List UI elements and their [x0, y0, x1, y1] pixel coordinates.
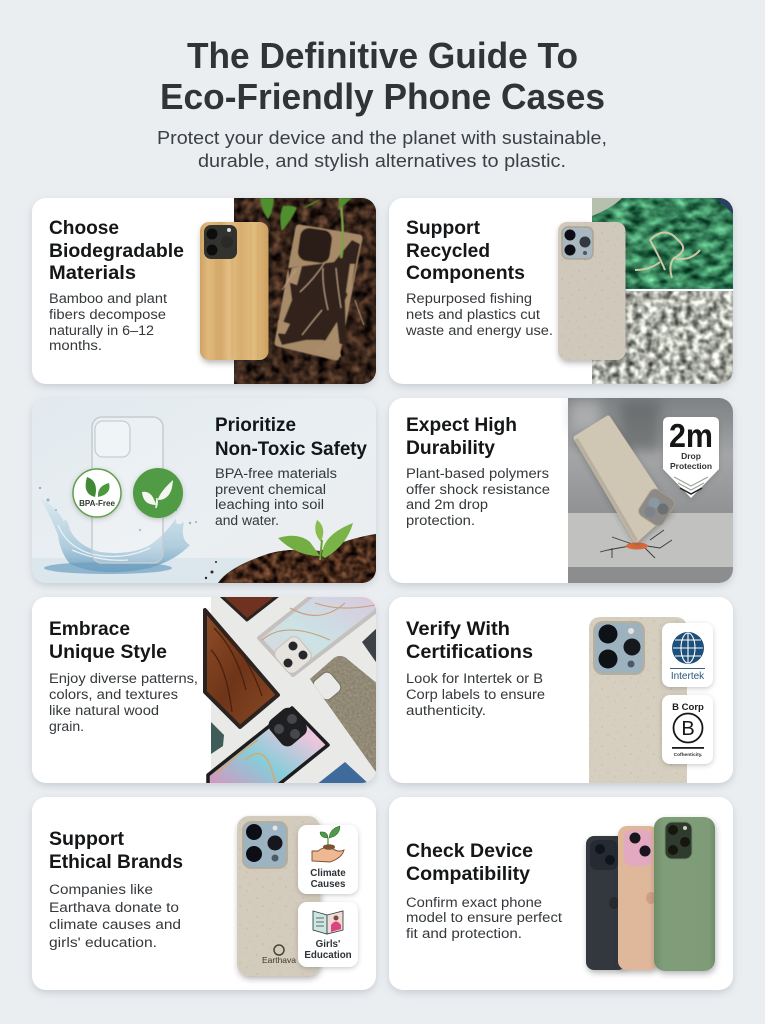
body text: durability: offer shock resistance [406, 482, 550, 498]
badge: 2m drop protection: Drop [681, 451, 701, 461]
illustration: clear phone case [92, 417, 163, 563]
body text: biodegradable: months. [49, 338, 102, 354]
body text: recycled [405, 291, 553, 339]
heading: choose biodegradable materials: Choose [49, 217, 119, 239]
body text: style [49, 671, 198, 735]
icon: BPA-free badge: BPA-Free [79, 499, 115, 508]
illustration: soil with seedling [205, 520, 376, 583]
body text: non-toxic [215, 466, 337, 529]
panel: prioritize non-toxic safety [32, 398, 376, 583]
heading: compatibility: Compatibility [406, 863, 530, 885]
badge: climate causes [298, 825, 358, 894]
icon: BPA-free badge [73, 469, 121, 517]
subtitle [157, 127, 607, 171]
body text: durability: and 2m drop [406, 497, 488, 513]
heading: ethical brands: Ethical Brands [49, 851, 183, 873]
body text: style: colors, and textures [49, 687, 178, 703]
photo: assorted patterned cases [205, 595, 385, 790]
badge: girls' education: Education [304, 950, 352, 961]
panel: support recycled components [389, 198, 733, 384]
illustration: water splash [32, 486, 256, 583]
phone: bamboo case [200, 222, 268, 360]
phone: peach case [618, 826, 658, 970]
phone: close-up speckled case [589, 617, 687, 783]
body text: durability: protection. [406, 513, 475, 529]
body text: style: grain. [49, 719, 84, 735]
body text: biodegradable [49, 291, 167, 354]
subtitle: durable, and stylish alternatives to plastic. [198, 150, 566, 171]
phones: three colour cases [586, 817, 715, 971]
panel: expect high durability [389, 398, 733, 583]
phone: Earthava case: Earthava [262, 955, 296, 965]
body text: ethical brands: Earthava donate to [49, 900, 179, 916]
body text: non-toxic: prevent chemical [215, 482, 326, 498]
body text: ethical brands [49, 882, 181, 951]
badge: girls' education: Girls' [316, 939, 340, 950]
badge: B Corp: B Corp [672, 702, 704, 713]
title: Eco-Friendly Phone Cases [160, 76, 605, 117]
heading: support recycled components [406, 217, 525, 284]
body text: certifications: authenticity. [406, 703, 486, 719]
body text: certifications: Corp labels to ensure [406, 687, 545, 703]
body text: biodegradable: Bamboo and plant [49, 291, 167, 307]
badge: B Corp [662, 695, 713, 764]
case: dark green corner [211, 722, 224, 754]
body text: ethical brands: girls' education. [49, 935, 157, 951]
body text: biodegradable: fibers decompose [49, 307, 166, 323]
body text: ethical brands: Companies like [49, 882, 153, 898]
body text: compatibility: Confirm exact phone [406, 895, 542, 911]
body text: durability: Plant-based polymers [406, 466, 549, 482]
heading: ethical brands [49, 828, 183, 873]
panel: choose biodegradable materials [32, 198, 376, 384]
heading: unique style [49, 618, 167, 663]
body text: biodegradable: naturally in 6–12 [49, 323, 154, 339]
body text: compatibility [406, 895, 562, 942]
icon: green leaf badge [133, 468, 183, 518]
phone: green case [654, 817, 715, 971]
body text: non-toxic: BPA-free materials [215, 466, 337, 482]
case: walnut wood [205, 610, 278, 727]
heading: choose biodegradable materials: Materials [49, 262, 136, 284]
heading: non-toxic safety: Non-Toxic Safety [215, 438, 367, 460]
heading: durability: Durability [406, 437, 495, 459]
body text: certifications: Look for Intertek or B [406, 671, 543, 687]
body text: non-toxic: and water. [215, 513, 279, 529]
case: grey fabric [310, 656, 376, 772]
photo: case decomposing in soil [234, 198, 376, 384]
heading: unique style: Unique Style [49, 641, 167, 663]
panel: support ethical brands [32, 797, 376, 990]
panel: verify with certifications [389, 597, 733, 783]
body text: compatibility: fit and protection. [406, 926, 522, 942]
body text: ethical brands: climate causes and [49, 917, 181, 933]
photo: phone drop on concrete [568, 398, 733, 583]
badge: 2m drop protection: Protection [670, 461, 712, 471]
heading: compatibility: Check Device [406, 840, 533, 862]
title: The Definitive Guide To [187, 35, 578, 76]
heading: durability [406, 414, 517, 459]
heading: ethical brands: Support [49, 828, 125, 850]
badge: climate causes: Climate [310, 868, 346, 879]
body text: recycled: waste and energy use. [405, 323, 553, 339]
subtitle: Protect your device and the planet with sustainable, [157, 127, 607, 148]
body text: recycled: Repurposed fishing [406, 291, 532, 307]
body text: recycled: nets and plastics cut [406, 307, 540, 323]
body text: style: Enjoy diverse patterns, [49, 671, 198, 687]
case: dark corner [362, 629, 376, 662]
body text: non-toxic: leaching into soil [215, 497, 324, 513]
badge: 2m drop protection [663, 417, 719, 498]
badge: Intertek: Intertek [671, 671, 705, 682]
heading: choose biodegradable materials [49, 217, 184, 284]
photo: fishing nets [592, 198, 733, 289]
photo: plastic pellets [592, 291, 733, 384]
case: blue fabric [318, 762, 367, 783]
phone: Earthava case [237, 816, 320, 976]
badge: 2m drop protection: 2m [669, 417, 713, 454]
phone: speckled recycled case [558, 222, 626, 360]
heading: unique style: Embrace [49, 618, 130, 640]
badge: B Corp: Cofhenticity. [674, 752, 702, 758]
badge: climate causes: Causes [311, 879, 346, 890]
badge: Intertek [662, 623, 713, 687]
case: pale marble [259, 595, 385, 676]
panel: embrace unique style [32, 595, 385, 790]
panel: check device compatibility [389, 797, 733, 990]
heading: non-toxic safety [215, 414, 367, 460]
body text: compatibility: model to ensure perfect [406, 910, 562, 926]
badge: girls' education [298, 902, 358, 967]
heading: compatibility [406, 840, 533, 885]
case: vivid marble [208, 704, 328, 790]
heading: certifications [406, 618, 533, 663]
heading: support recycled components: Recycled [406, 240, 490, 262]
body text: certifications [406, 671, 545, 719]
heading: choose biodegradable materials: Biodegradable [49, 240, 184, 262]
phone: dark case [586, 836, 626, 970]
heading: non-toxic safety: Prioritize [215, 414, 296, 436]
heading: certifications: Certifications [406, 641, 533, 663]
heading: durability: Expect High [406, 414, 517, 436]
heading: certifications: Verify With [406, 618, 510, 640]
body text: durability [406, 466, 550, 529]
heading: support recycled components: Components [406, 262, 525, 284]
badge: B Corp: B [681, 718, 695, 740]
body text: style: like natural wood [49, 703, 159, 719]
title [160, 35, 605, 117]
heading: support recycled components: Support [406, 217, 481, 239]
case: top wood [220, 595, 279, 620]
